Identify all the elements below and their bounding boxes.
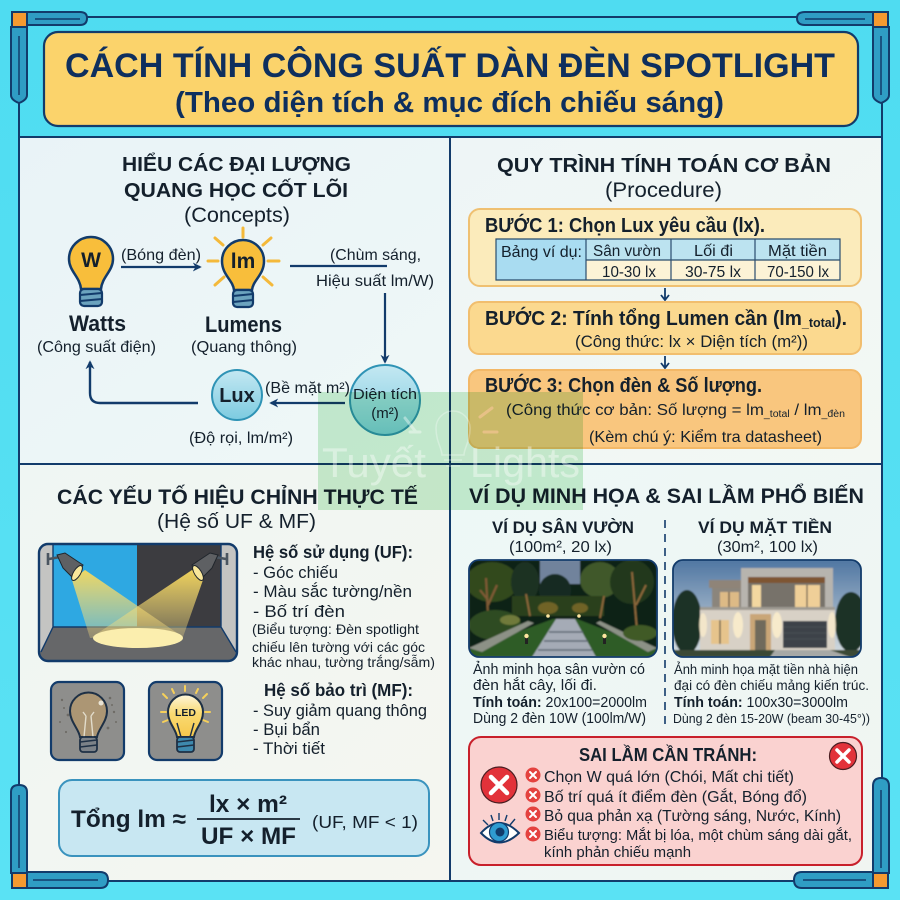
caption: garden example: đèn hắt cây, lối đi. (473, 677, 597, 694)
icon: LED bulb (149, 682, 222, 760)
corner: bottom right (794, 778, 889, 888)
step 3: (Kèm chú ý: Kiểm tra datasheet) (589, 428, 822, 446)
step 1 (469, 209, 861, 286)
heading: concepts (122, 153, 351, 227)
text: maintenance factor: Hệ số bảo trì (MF): (264, 680, 413, 700)
list: mistakes: Chọn W quá lớn (Chói, Mất chi tiết) (544, 769, 794, 786)
label: lumens (191, 312, 297, 356)
formula box: UF × MF (201, 823, 296, 850)
text: maintenance factor (253, 680, 427, 758)
heading: concepts: QUANG HỌC CỐT LÕI (124, 178, 348, 202)
label: watts (37, 311, 156, 356)
table: lux examples: Mặt tiền (768, 243, 827, 260)
text: utilization factor: - Màu sắc tường/nền (253, 582, 412, 601)
illustration: spotlights on walls (39, 544, 237, 661)
heading: correction factors: CÁC YẾU TỐ HIỆU CHỈNH THỰC TẾ (57, 485, 418, 509)
heading: garden example (492, 518, 634, 556)
text: utilization factor: chiếu lên tường với các góc (252, 639, 425, 655)
caption: facade example: Ảnh minh họa mặt tiền nhà hiện (674, 661, 858, 677)
arrow: area to lux: (Bề mặt m²) (265, 380, 350, 397)
heading: correction factors: (Hệ số UF & MF) (157, 511, 316, 533)
node: area circle (350, 365, 420, 435)
text: maintenance factor: - Suy giảm quang thông (253, 701, 427, 720)
heading: procedure (497, 154, 831, 202)
caption: facade example: Dùng 2 đèn 15-20W (beam 30-45°)) (673, 711, 870, 726)
arrow: lumens to area (290, 247, 434, 362)
arrow: step 1 to 2 (661, 288, 669, 300)
step 3: _total (763, 409, 790, 420)
icon: top right cross (830, 742, 856, 770)
title banner: (Theo diện tích & mục đích chiếu sáng) (175, 87, 724, 119)
label: lumens: Lumens (205, 312, 282, 337)
heading: concepts: (Concepts) (184, 204, 290, 227)
icon: watt bulb: W (81, 249, 101, 272)
text: utilization factor: khác nhau, tường trắng/sẫm) (252, 654, 435, 670)
heading: facade example: (30m², 100 lx) (717, 539, 818, 556)
label: watts: (Công suất điện) (37, 339, 156, 356)
caption: garden example (473, 661, 647, 727)
table: lux examples (496, 239, 840, 281)
list: mistakes: kính phản chiếu mạnh (544, 844, 691, 861)
icon: left spotlight (48, 553, 84, 582)
step 3: (Công thức cơ bản: Số lượng = lm (506, 402, 751, 419)
list: mistakes (526, 768, 852, 861)
arrow: lux to watts (90, 362, 198, 403)
heading: facade example (698, 518, 832, 556)
node: area circle: Diện tích (353, 386, 417, 403)
list: mistakes: Biểu tượng: Mắt bị lóa, một chùm sáng dài gắt, (544, 827, 852, 844)
text: utilization factor: (Biểu tượng: Đèn spotlight (252, 621, 419, 637)
step 3: BƯỚC 3: Chọn đèn & Số lượng. (485, 373, 762, 397)
caption: garden example: Tính toán: 20x100=2000lm (473, 695, 647, 711)
arrow: lumens to area: (Chùm sáng, (330, 247, 421, 264)
label: lumens: (Quang thông) (191, 339, 297, 356)
heading: examples and mistakes: VÍ DỤ MINH HỌA & SAI LẦM PHỔ BIẾN (469, 484, 864, 508)
icon: lumen bulb with rays (208, 228, 279, 307)
caption: garden example: Ảnh minh họa sân vườn có (473, 661, 645, 678)
list: mistakes: Bỏ qua phản xạ (Tường sáng, Nước, Kính) (544, 808, 841, 825)
caption: garden example: Dùng 2 đèn 10W (100lm/W) (473, 711, 646, 727)
title banner: CÁCH TÍNH CÔNG SUẤT DÀN ĐÈN SPOTLIGHT (65, 46, 835, 85)
table: lux examples: 70-150 lx (767, 264, 829, 281)
icon: lumen bulb with rays: lm (231, 250, 255, 273)
panel: concepts (19, 137, 450, 464)
arrow: lumens to area: Hiệu suất lm/W) (316, 273, 434, 290)
arrow: step 2 to 3 (661, 356, 669, 368)
corner: top left (11, 12, 87, 103)
step 2: BƯỚC 2: Tính tổng Lumen cần (lm (485, 308, 814, 330)
corner: top right (797, 12, 889, 103)
text: maintenance factor: - Thời tiết (253, 739, 325, 758)
step 1: BƯỚC 1: Chọn Lux yêu cầu (lx). (485, 213, 765, 237)
table: lux examples: Sân vườn (593, 243, 661, 260)
table: lux examples: 10-30 lx (602, 264, 656, 281)
watermark: Lights (470, 439, 580, 486)
icon: watt bulb (69, 237, 113, 306)
icon: dusty bulb (51, 682, 124, 760)
heading: procedure: QUY TRÌNH TÍNH TOÁN CƠ BẢN (497, 154, 831, 177)
step 3 (469, 370, 861, 448)
text: utilization factor: Hệ số sử dụng (UF): (253, 542, 413, 562)
step 3: _đèn (820, 409, 845, 420)
label: illuminance: (Độ rọi, lm/m²) (189, 430, 293, 447)
panel: examples and mistakes (450, 464, 882, 881)
panel: correction factors (19, 464, 450, 881)
text: utilization factor: - Góc chiếu (253, 563, 338, 582)
node: lux circle: Lux (219, 385, 255, 407)
text: maintenance factor: - Bụi bẩn (253, 720, 320, 739)
caption: facade example (673, 661, 870, 726)
step 2 (469, 302, 861, 354)
arrow: bulb to lumens: (Bóng đèn) (121, 247, 201, 264)
text: utilization factor (252, 542, 435, 670)
formula box: lx × m² (209, 791, 287, 818)
callout: mistakes to avoid: SAI LẦM CẦN TRÁNH: (579, 744, 757, 765)
step 2: (Công thức: lx × Diện tích (m²)) (575, 332, 808, 351)
icon: eye (481, 813, 519, 842)
icon: LED bulb: LED (175, 707, 196, 719)
table: lux examples: 30-75 lx (685, 264, 741, 281)
step 2: _total (801, 315, 835, 330)
photo: modern house facade (672, 560, 867, 657)
callout: mistakes to avoid (469, 737, 862, 865)
corner: bottom left (11, 785, 108, 888)
text: utilization factor: - Bố trí đèn (253, 602, 345, 621)
step 2: ). (835, 308, 847, 330)
heading: garden example: (100m², 20 lx) (509, 539, 612, 556)
table: lux examples: Lối đi (694, 243, 733, 260)
caption: facade example: đại có đèn chiếu mảng kiến trúc. (674, 677, 869, 693)
watermark (318, 392, 583, 510)
watermark: Tuyết (322, 439, 426, 486)
heading: correction factors (57, 485, 418, 533)
heading: concepts: HIỂU CÁC ĐẠI LƯỢNG (122, 153, 351, 176)
heading: garden example: VÍ DỤ SÂN VƯỜN (492, 518, 634, 537)
photo: garden at night (466, 560, 657, 657)
formula box (59, 780, 429, 856)
node: area circle: (m²) (371, 405, 399, 422)
node: lux circle (212, 370, 262, 420)
list: mistakes: Bố trí quá ít điểm đèn (Gắt, Bóng đổ) (544, 787, 807, 806)
label: watts: Watts (69, 311, 126, 336)
icon: right spotlight (191, 553, 227, 582)
step 3: / lm (790, 402, 822, 419)
icon: large cross (481, 767, 517, 803)
formula box: (UF, MF < 1) (312, 812, 418, 832)
heading: facade example: VÍ DỤ MẶT TIỀN (698, 518, 832, 537)
table: lux examples: Bảng ví dụ: (501, 244, 582, 261)
formula box: Tổng lm ≈ (71, 806, 186, 833)
caption: facade example: Tính toán: 100x30=3000lm (674, 695, 848, 711)
panel: procedure (450, 137, 882, 464)
title banner (44, 32, 858, 126)
heading: procedure: (Procedure) (605, 179, 722, 202)
